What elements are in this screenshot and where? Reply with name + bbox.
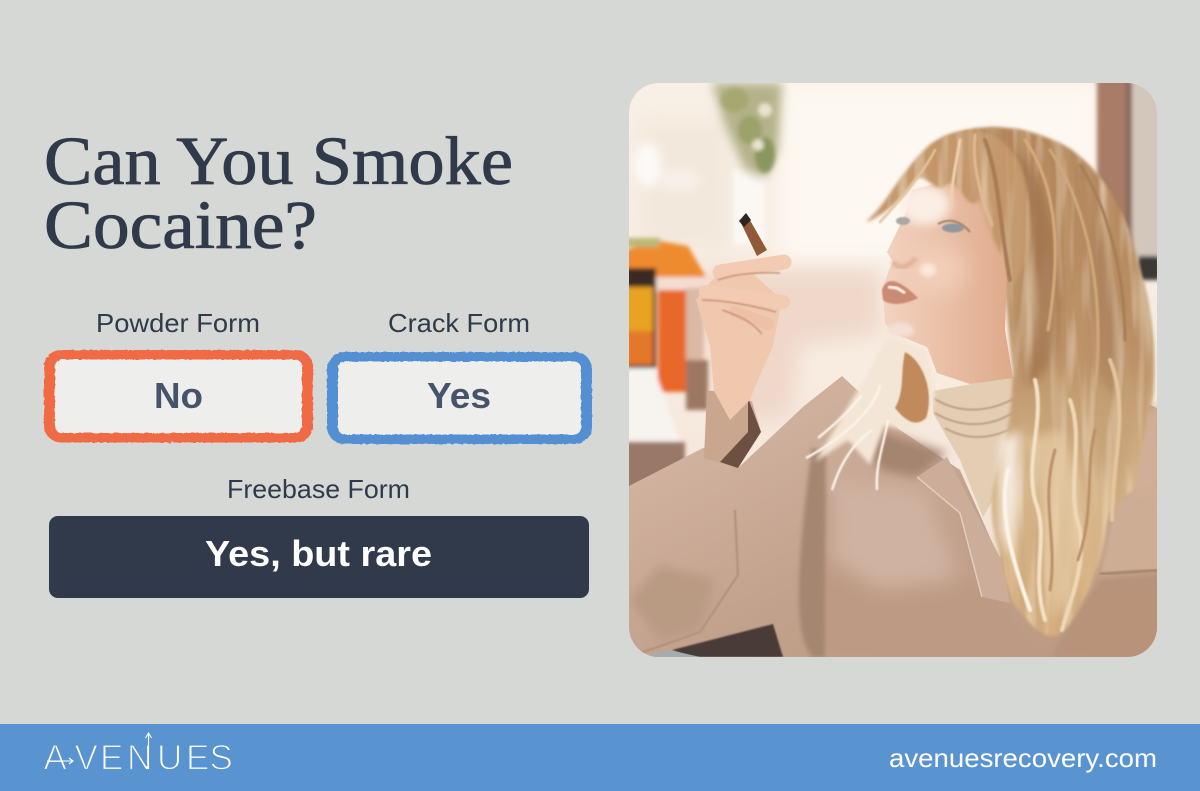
turtleneck	[933, 376, 1016, 517]
hand	[696, 213, 784, 420]
website url: avenuesrecovery.com	[889, 743, 1157, 773]
coat	[625, 376, 1161, 662]
title	[44, 123, 513, 263]
label: powder form: Powder Form	[96, 308, 260, 338]
coat cuff	[704, 390, 761, 468]
answer text: yes, but rare: Yes, but rare	[205, 533, 432, 574]
coat details	[629, 405, 1161, 657]
answer box: yes	[327, 352, 592, 444]
background: pink table	[700, 270, 880, 420]
panel: powder form	[44, 308, 313, 442]
hair back	[930, 127, 1154, 636]
panel: freebase form	[49, 474, 589, 598]
footer bar	[0, 724, 1200, 791]
title: Can You Smoke	[44, 123, 513, 199]
answer text: yes: Yes	[427, 375, 491, 416]
hair left lock	[806, 335, 935, 490]
answer text: no: No	[154, 375, 203, 416]
answer box: no	[44, 350, 313, 442]
hair bangs	[866, 131, 1030, 285]
photo: woman smoking	[625, 78, 1162, 662]
label: crack form: Crack Form	[388, 308, 530, 338]
background: plant and vase	[712, 83, 782, 245]
background: wooden post	[1094, 83, 1157, 284]
logo: avenues: AVENUES	[44, 738, 233, 778]
face	[882, 170, 1013, 384]
panel: crack form	[327, 308, 592, 444]
cigarette	[741, 220, 767, 256]
background: orange objects	[625, 238, 710, 502]
hair darker shading	[1000, 150, 1119, 620]
face details	[882, 185, 970, 337]
hair strands	[880, 135, 1125, 630]
smoke	[635, 143, 700, 190]
label: freebase form: Freebase Form	[227, 474, 410, 504]
answer box: yes, but rare	[49, 516, 589, 598]
title: Cocaine?	[44, 187, 317, 263]
